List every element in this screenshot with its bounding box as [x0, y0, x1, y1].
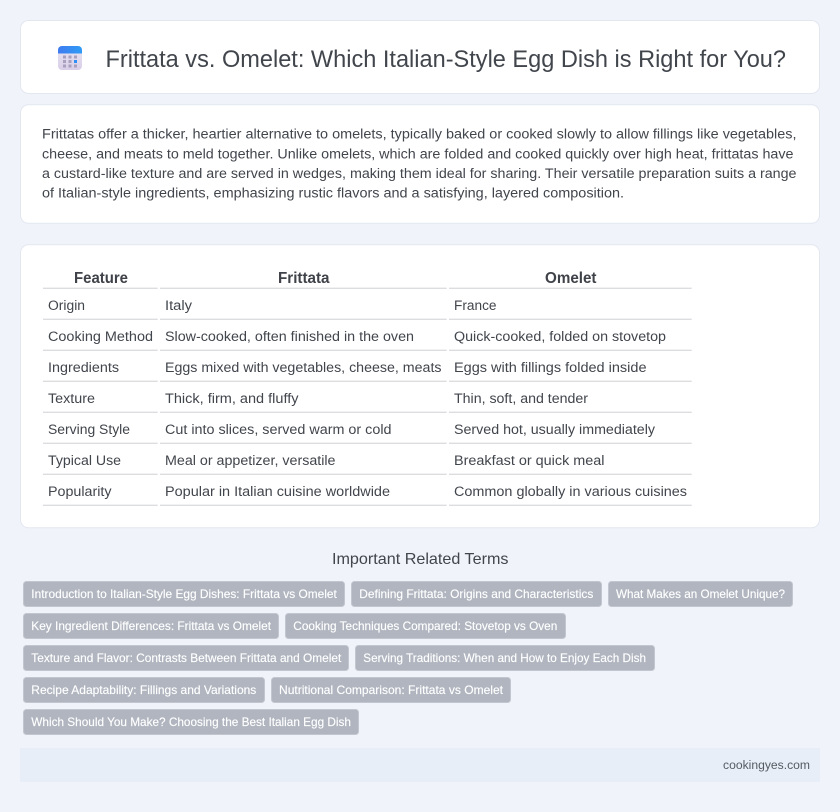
- panel: introduction: [20, 105, 820, 223]
- tag: defining frittata: [352, 582, 602, 606]
- intro paragraph: of Italian-style ingredients, emphasizing rustic flavors and a satisfying, layered composition.: [42, 186, 624, 202]
- row: origin: France: [454, 298, 497, 314]
- tag: cooking techniques: [286, 614, 566, 638]
- tag: key ingredients: [24, 614, 278, 638]
- row: ingredients: Ingredients: [48, 360, 119, 376]
- intro paragraph: Frittatas offer a thicker, heartier alternative to omelets, typically baked or cooked slowly to allow fillings like vegetables,: [42, 127, 796, 143]
- table header: Feature: [74, 270, 128, 287]
- heading: important related terms: Important Related Terms: [332, 551, 508, 568]
- row: typical use: [43, 453, 692, 474]
- intro paragraph: [42, 127, 797, 202]
- row: texture: Thin, soft, and tender: [454, 391, 588, 407]
- row: typical use: Typical Use: [48, 453, 121, 469]
- tag: cooking techniques: Cooking Techniques Compared: Stovetop vs Oven: [293, 619, 557, 633]
- row: ingredients: Eggs mixed with vegetables, cheese, meats: [165, 360, 442, 376]
- footer: [20, 748, 820, 782]
- table header: Frittata: [278, 270, 330, 287]
- row: popularity: Common globally in various cuisines: [454, 484, 687, 500]
- row: cooking method: Quick-cooked, folded on stovetop: [454, 329, 666, 345]
- row: typical use: Breakfast or quick meal: [454, 453, 604, 469]
- tag: texture and flavor: Texture and Flavor: Contrasts Between Frittata and Omelet: [31, 651, 342, 665]
- row: ingredients: Eggs with fillings folded inside: [454, 360, 647, 376]
- row: popularity: [43, 484, 692, 505]
- tag: recipe adaptability: [24, 678, 264, 702]
- intro paragraph: a custard-like texture and are served in wedges, making them ideal for sharing. Their versatile preparation suits a range: [42, 166, 797, 182]
- tag: key ingredients: Key Ingredient Differences: Frittata vs Omelet: [31, 619, 272, 633]
- row: cooking method: Slow-cooked, often finished in the oven: [165, 329, 414, 345]
- row: origin: Italy: [165, 298, 193, 314]
- tag: introduction: Introduction to Italian-Style Egg Dishes: Frittata vs Omelet: [31, 587, 337, 601]
- row: popularity: Popular in Italian cuisine worldwide: [165, 484, 390, 500]
- tag list: related terms: [24, 582, 792, 734]
- tag: serving traditions: [356, 646, 654, 670]
- row: texture: Thick, firm, and fluffy: [165, 391, 299, 407]
- footer source text: cookingyes.com: [723, 758, 810, 772]
- table header: [43, 270, 692, 288]
- intro paragraph: cheese, and meats to meld together. Unlike omelets, which are folded and cooked quickly over high heat, frittatas have: [42, 146, 794, 162]
- row: serving style: Cut into slices, served warm or cold: [165, 422, 392, 438]
- tag: omelet unique: What Makes an Omelet Unique?: [616, 587, 785, 601]
- header panel: [20, 20, 820, 94]
- row: texture: Texture: [48, 391, 95, 407]
- row: cooking method: [43, 329, 692, 350]
- tag: nutritional comparison: [272, 678, 510, 702]
- tag: defining frittata: Defining Frittata: Origins and Characteristics: [359, 587, 593, 601]
- row: typical use: Meal or appetizer, versatile: [165, 453, 336, 469]
- row: origin: Origin: [48, 298, 85, 314]
- tag: which should you make: [24, 710, 358, 734]
- title: Frittata vs. Omelet: Which Italian-Style Egg Dish is Right for You?: [106, 46, 786, 73]
- row: origin: [43, 298, 692, 319]
- table header: Omelet: [545, 270, 596, 287]
- tag: recipe adaptability: Recipe Adaptability: Fillings and Variations: [31, 683, 256, 697]
- row: serving style: [43, 422, 692, 443]
- tag: serving traditions: Serving Traditions: When and How to Enjoy Each Dish: [363, 651, 646, 665]
- tag: which should you make: Which Should You Make? Choosing the Best Italian Egg Dish: [31, 715, 351, 729]
- row: serving style: Served hot, usually immediately: [454, 422, 656, 438]
- row: cooking method: Cooking Method: [48, 329, 153, 345]
- panel: comparison table: [20, 245, 820, 528]
- row: serving style: Serving Style: [48, 422, 130, 438]
- tag: nutritional comparison: Nutritional Comparison: Frittata vs Omelet: [279, 683, 504, 697]
- tag: introduction: [24, 582, 344, 606]
- row: ingredients: [43, 360, 692, 381]
- icon: calendar: [58, 46, 82, 70]
- tag: texture and flavor: [24, 646, 348, 670]
- row: popularity: Popularity: [48, 484, 112, 500]
- tag: omelet unique: [608, 582, 792, 606]
- row: texture: [43, 391, 692, 412]
